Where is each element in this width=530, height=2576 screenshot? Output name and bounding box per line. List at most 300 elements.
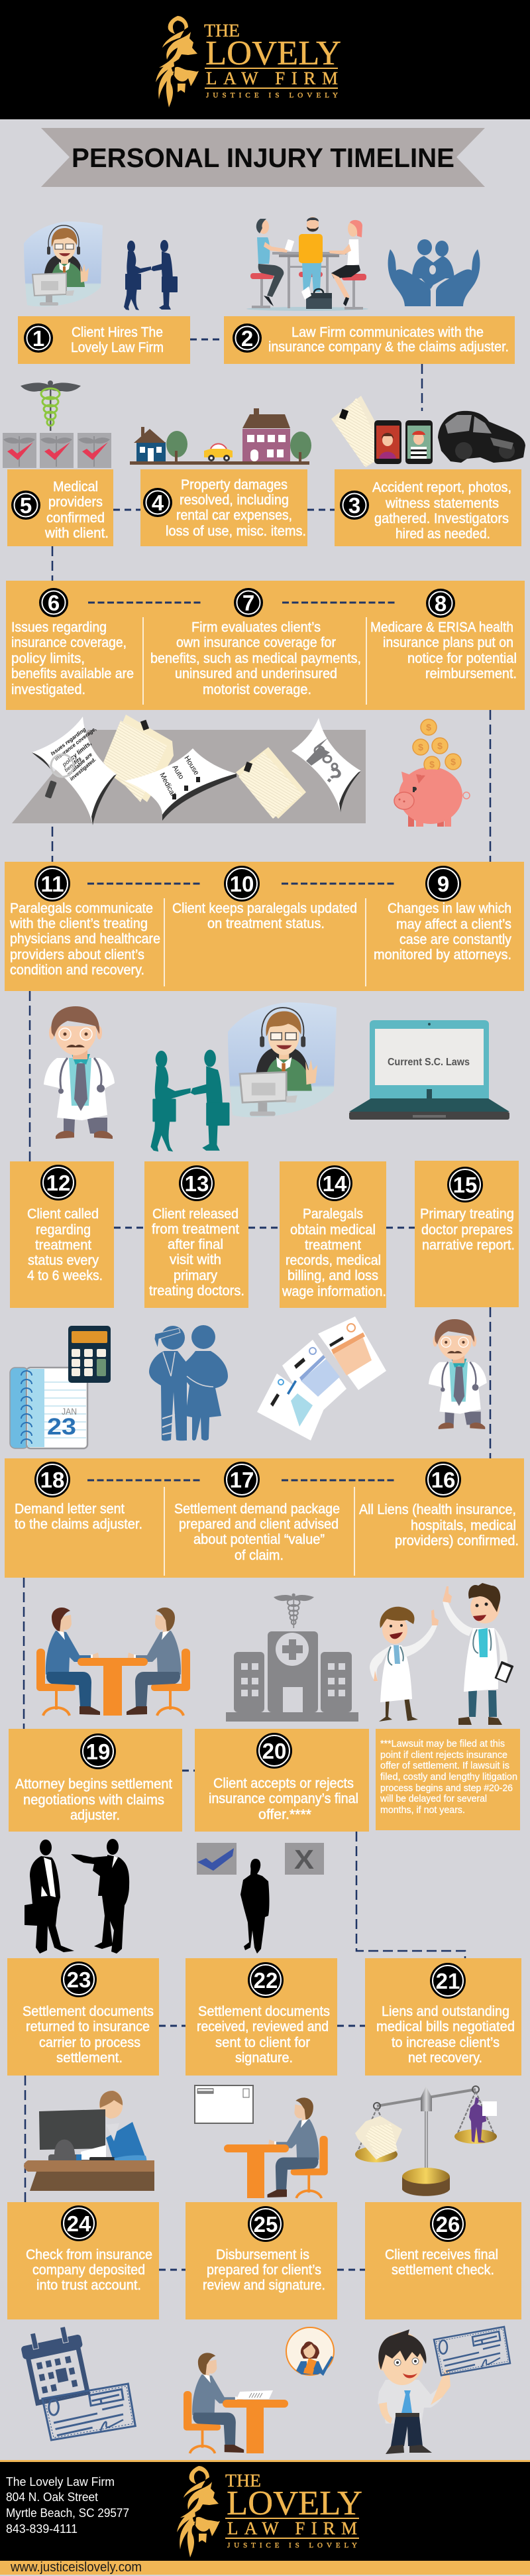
step 7 text: benefits, such as medical payments, [150,651,361,666]
icon: accept check box [197,1843,237,1875]
step text: treatment [35,1238,91,1253]
step text: with client. [44,526,109,541]
icon: three checked medical squares [3,433,111,468]
step text: gathered. Investigators [374,511,509,526]
step 5 [7,469,113,546]
badge 12: 12 [46,1171,70,1195]
icon: medical bills [257,1317,386,1440]
icon: laptop [349,1020,509,1120]
step text: Primary treating [420,1206,514,1222]
note text: will be delayed for several [380,1794,487,1804]
box [415,1161,519,1307]
step text [268,325,509,355]
badge 14: 14 [323,1171,347,1196]
step text: adjuster. [70,1808,120,1823]
step text: Property damages [181,477,288,493]
step text: insurance company’s final [209,1791,358,1806]
step 17 text: of claim. [235,1548,284,1563]
step text [44,479,109,541]
step text: net recovery. [408,2050,482,2066]
step text [71,325,164,355]
badge 24 [61,2205,97,2241]
step 17 text: about potential “value” [193,1532,325,1547]
step text: Client Hires The [72,325,163,340]
step 8 text: notice for potential [407,651,517,666]
box [365,2202,521,2319]
note text: months, if not years. [380,1805,465,1816]
badge 6: 6 [48,591,60,615]
step 15 [415,1161,519,1307]
step 16 text [359,1502,519,1549]
note text: ***Lawsuit may be filed at this [380,1739,505,1749]
step 18 text: Demand letter sent [15,1501,125,1517]
footer wordmark: LAW FIRM [227,2518,357,2538]
note text: offer of settlement. If lawsuit is [380,1761,509,1771]
step 11 text: Paralegals communicate [10,901,153,916]
icon: check left [42,2384,135,2440]
step text: medical bills negotiated [376,2019,515,2034]
icon: doctor [44,1006,115,1139]
box [280,1161,386,1308]
step text: negotiations with claims [23,1792,164,1808]
footer wordmark: JUSTICE IS LOVELY [227,2542,357,2549]
medical question paper: ? [320,762,346,790]
icon: call-center operator large [228,1002,337,1117]
step text: returned to insurance [26,2019,150,2034]
step text: to increase client’s [392,2035,500,2050]
badge 13: 13 [185,1171,209,1196]
step text [166,477,306,539]
badge 15 [447,1167,483,1202]
illustration: houses and car [130,408,311,465]
step 9 text: monitored by attorneys. [374,947,511,963]
box [224,316,515,364]
step text: insurance company & the claims adjuster. [268,339,509,355]
step 14 [280,1161,386,1308]
step text: carrier to process [39,2035,140,2050]
illustration: documents, phones and wrecked car [331,396,525,467]
icon: handshake silhouettes navy [124,240,178,310]
coverage paper: House [182,754,200,777]
step 11 text: physicians and healthcare [10,931,160,947]
badge 8 [426,589,455,618]
badge 18 [34,1462,70,1497]
illustration: negotiation at table [36,1608,190,1716]
policy paper: available are [66,751,93,777]
step 9 text: may affect a client’s [396,917,511,932]
badge 15: 15 [453,1173,477,1197]
step text: Settlement documents [198,2004,330,2019]
step 7 text: uninsured and underinsured [175,666,337,681]
step 11 text: with the client’s treating [9,916,148,931]
step text [149,1206,244,1299]
panel: steps 6 to 8 [6,581,525,710]
icon: two businessmen silhouettes [25,1839,129,1954]
step text: after final [168,1237,223,1252]
illustration: team meeting at table [246,217,368,311]
illustration: piggy bank and coins: $ [426,722,431,732]
badge 7 [234,588,263,617]
step 17 text: Settlement demand package [174,1501,340,1517]
box [18,316,190,364]
step text: offer.**** [258,1807,311,1822]
badge 19: 19 [86,1739,110,1764]
step text: witness statements [385,496,499,511]
step text: Client called [27,1206,99,1222]
step text: 4 to 6 weeks. [27,1268,103,1283]
badge 26 [430,2206,466,2242]
badge 2: 2 [241,326,253,351]
icon: lion mane footer [177,2466,220,2557]
note text: process begins and step #20-26 [380,1783,513,1794]
coverage paper: Auto [170,764,186,781]
box [7,1958,159,2076]
badge 18: 18 [40,1468,64,1492]
box [365,1958,521,2076]
logo wordmark: LAW FIRM [206,68,338,88]
box [186,1958,337,2076]
note text: point if client rejects insurance [380,1750,507,1761]
step text: into trust account. [36,2278,141,2293]
step text [209,1776,358,1822]
step text [27,1206,103,1283]
policy paper: benefits [64,756,83,774]
step text: Lovely Law Firm [71,340,164,355]
step 25 [186,2202,337,2319]
title: PERSONAL INJURY TIMELINE [72,143,454,173]
badge 3: 3 [348,493,360,518]
callout: lawsuit note [376,1729,520,1830]
step text [203,2247,325,2293]
icon: handshake silhouettes teal [150,1050,229,1151]
illustration: piggy bank and coins: $ [437,740,443,751]
logo wordmark: THE [204,21,240,40]
badge 10: 10 [230,872,254,896]
badge 25 [248,2206,284,2242]
footer URL bar [0,2560,530,2575]
step 9 text [374,901,511,963]
step text: Client accepts or rejects [213,1776,354,1791]
step 24 [7,2202,159,2319]
step text: sent to client for [215,2035,310,2050]
step text: regarding [36,1222,91,1238]
box [7,469,113,546]
badge 4 [143,488,172,517]
title ribbon [41,128,485,187]
coverage paper: Medical [158,772,177,797]
badge 23 [61,1961,97,1997]
step 1 [18,316,190,364]
policy paper [32,717,117,825]
badge 8: 8 [435,591,447,616]
badge 21 [430,1963,466,1999]
step 26 [365,2202,521,2319]
step 7 text [150,620,361,697]
footer address: Myrtle Beach, SC 29577 [6,2506,129,2520]
stacked papers right [236,747,306,819]
badge 22: 22 [254,1968,278,1993]
step text [23,2004,154,2066]
badge 17: 17 [230,1468,254,1492]
step text: resolved, including [180,493,289,508]
icon: two cheerful doctors [370,1583,513,1725]
illustration: envelope and seated man [195,2085,328,2198]
step text [372,480,511,542]
step text: doctor prepares [421,1222,513,1238]
step 6 text: policy limits, [11,651,85,666]
badge 20: 20 [262,1739,286,1763]
illustration: piggy bank and coins: $ [418,742,423,752]
panel: steps 11 to 9 [5,862,524,991]
step text: loss of use, misc. items. [166,524,306,539]
icon: calendar [19,2323,93,2406]
step text: company deposited [32,2262,145,2278]
badge 4: 4 [152,491,164,515]
step 18 text: to the claims adjuster. [15,1517,142,1532]
footer URL bar: www.justiceislovely.com [10,2560,142,2575]
badge 10 [224,866,260,902]
step text: prepared for client’s [207,2262,321,2278]
step text: received, reviewed and [197,2019,329,2034]
step text: primary [174,1268,217,1283]
icon: calculator [68,1326,111,1383]
step 10 text: Client keeps paralegals updated [172,901,357,916]
date [47,1406,77,1440]
badge 7: 7 [242,591,254,615]
step text: treating doctors. [149,1283,244,1299]
step text: from treatment [152,1222,239,1237]
step 3 [335,469,521,546]
step 6 text: investigated. [11,682,85,697]
step text [420,1206,515,1253]
step text: Disbursement is [216,2247,309,2262]
stacked papers [103,715,174,802]
badge 3 [340,491,369,520]
step 6 text [11,620,134,697]
icon: injured couple [149,1325,228,1441]
logo wordmark [204,21,341,99]
step 22 [186,1958,337,2076]
box [195,1729,369,1832]
step text: treatment [305,1238,361,1253]
badge 21: 21 [436,1969,460,1993]
badge 1: 1 [32,326,44,351]
step text [197,2004,330,2066]
footer wordmark [225,2471,362,2549]
policy paper: insurance coverage, [54,726,97,762]
box [335,469,521,546]
badge 5 [11,491,40,520]
step 18 text [15,1501,142,1532]
footer wordmark: THE [225,2471,261,2490]
step text [385,2247,498,2278]
badge 16: 16 [431,1468,455,1492]
illustration: balance scale [355,2086,497,2196]
policy paper: policy limits, [60,740,93,768]
illustration: client with check [378,2329,450,2454]
badge 24: 24 [67,2211,91,2236]
step text: settlement check. [392,2262,494,2278]
step 21 [365,1958,521,2076]
icon: lion mane [156,16,199,107]
footer address: The Lovely Law Firm [6,2475,115,2488]
step 6 text: benefits available are [11,666,134,681]
header band [0,0,530,119]
step text: settlement. [56,2050,123,2066]
footer band [0,2462,530,2561]
step text: review and signature. [203,2278,325,2293]
badge 1 [24,323,53,353]
panel: steps 18 to 16 [5,1458,524,1578]
badge 19 [80,1733,116,1769]
step text: hired as needed. [396,526,490,542]
step text: Settlement documents [23,2004,154,2019]
step 12 [10,1161,114,1308]
step 8 text [370,620,517,681]
step text: confirmed [46,510,105,526]
icon: single businessman silhouette [240,1859,269,1954]
icon: reject box [285,1843,324,1875]
badge 20 [256,1733,292,1769]
icon: doctor small [429,1319,487,1429]
logo wordmark: JUSTICE IS LOVELY [206,91,338,99]
step 17 text: prepared and client advised [179,1517,339,1532]
step text: Attorney begins settlement [15,1777,172,1792]
step 23 [7,1958,159,2076]
step 8 text: Medicare & ERISA health [370,620,513,635]
step text: Law Firm communicates with the [292,325,484,340]
step text: status every [28,1253,99,1268]
icon: hospital [226,1594,358,1722]
footer address [6,2475,129,2536]
box [144,1161,248,1308]
step 10 text: on treatment status. [207,916,325,931]
badge 11 [34,866,70,902]
step 17 text [174,1501,340,1563]
badge 17 [224,1462,260,1497]
step 16 text: providers) confirmed. [395,1533,519,1549]
illustration: piggy bank and coins: $ [429,759,435,770]
footer top rule [0,2460,530,2462]
step 9 text: case are constantly [399,932,511,947]
policy paper: Issues regarding [50,727,87,757]
illustration: piggy bank and coins: $ [450,756,456,767]
step text: Liens and outstanding [382,2004,509,2019]
badge 13 [179,1165,215,1201]
illustration: seated man signing [184,2353,288,2453]
box [9,1729,182,1832]
badge 11: 11 [41,872,64,896]
badge 22 [248,1962,284,1998]
badge 26: 26 [436,2212,460,2237]
step 13 [144,1161,248,1308]
step 9 text: Changes in law which [388,901,511,916]
step text: Check from insurance [26,2247,152,2262]
illustration: person at computer desk [24,2091,154,2191]
footer address: 843-839-4111 [6,2522,78,2536]
step text [15,1777,172,1823]
step 4 [140,469,307,546]
step text: narrative report. [422,1238,515,1253]
step text: wage information. [282,1284,386,1299]
badge 23: 23 [67,1967,91,1992]
step text [376,2004,515,2066]
laptop label: Current S.C. Laws [388,1057,470,1068]
step 20 [195,1729,369,1832]
date: JAN [62,1406,77,1417]
illustration: gray table with papers [12,715,366,825]
badge 25: 25 [254,2212,278,2237]
step text: billing, and loss [288,1268,378,1283]
step text: Medical [53,479,98,495]
icon: reject box: X [294,1844,314,1875]
badge 12 [40,1165,76,1200]
badge 14 [317,1165,352,1201]
step 19 [9,1729,182,1832]
icon: notebook calendar [10,1368,87,1448]
step 10 text [172,901,357,931]
badge 9: 9 [437,872,449,896]
step text: rental car expenses, [176,508,292,523]
icon: woman in circle [286,2327,334,2376]
step 7 text: own insurance coverage for [176,635,336,650]
step 7 text: motorist coverage. [203,682,311,697]
step 6 text: Issues regarding [11,620,107,635]
logo wordmark: LOVELY [205,34,341,72]
step text: Client released [152,1206,238,1222]
note text [380,1739,517,1816]
box [7,2202,159,2319]
box [186,2202,337,2319]
step text [26,2247,152,2293]
medical question paper [292,718,361,813]
badge 16 [425,1462,461,1497]
icon: check right [434,2327,510,2375]
step text: providers [48,495,103,510]
policy paper: investigated. [69,756,97,782]
step text: signature. [235,2050,293,2066]
illustration: piggy bank and coins [394,719,470,827]
footer wordmark: LOVELY [227,2485,362,2522]
step 16 text: hospitals, medical [411,1518,516,1533]
date: 23 [47,1414,76,1440]
logo: footer [177,2466,362,2557]
step 7 text: Firm evaluates client’s [191,620,321,635]
box [10,1161,114,1308]
step 11 text: providers about client’s [10,947,144,963]
icon: caduceus [21,381,81,431]
step text: Paralegals [303,1206,363,1222]
icon: call-center operator [24,221,103,306]
note text: filed, costly and lengthy litigation [380,1772,517,1783]
step 16 text: All Liens (health insurance, [359,1502,516,1517]
badge 6 [39,588,68,617]
step 11 text: condition and recovery. [10,963,144,978]
step 2 [224,316,515,364]
logo: header [156,16,341,107]
badge 5: 5 [20,493,32,518]
badge 9 [425,866,461,902]
step 8 text: reimbursement. [425,666,517,681]
step text: visit with [170,1252,221,1267]
step text: Accident report, photos, [372,480,511,495]
step text: records, medical [286,1253,381,1268]
step text: Client receives final [385,2247,498,2262]
step 8 text: insurance plans put on [383,635,513,650]
step text: obtain medical [290,1222,376,1238]
box [140,469,307,546]
icon: family in hands [388,239,480,306]
